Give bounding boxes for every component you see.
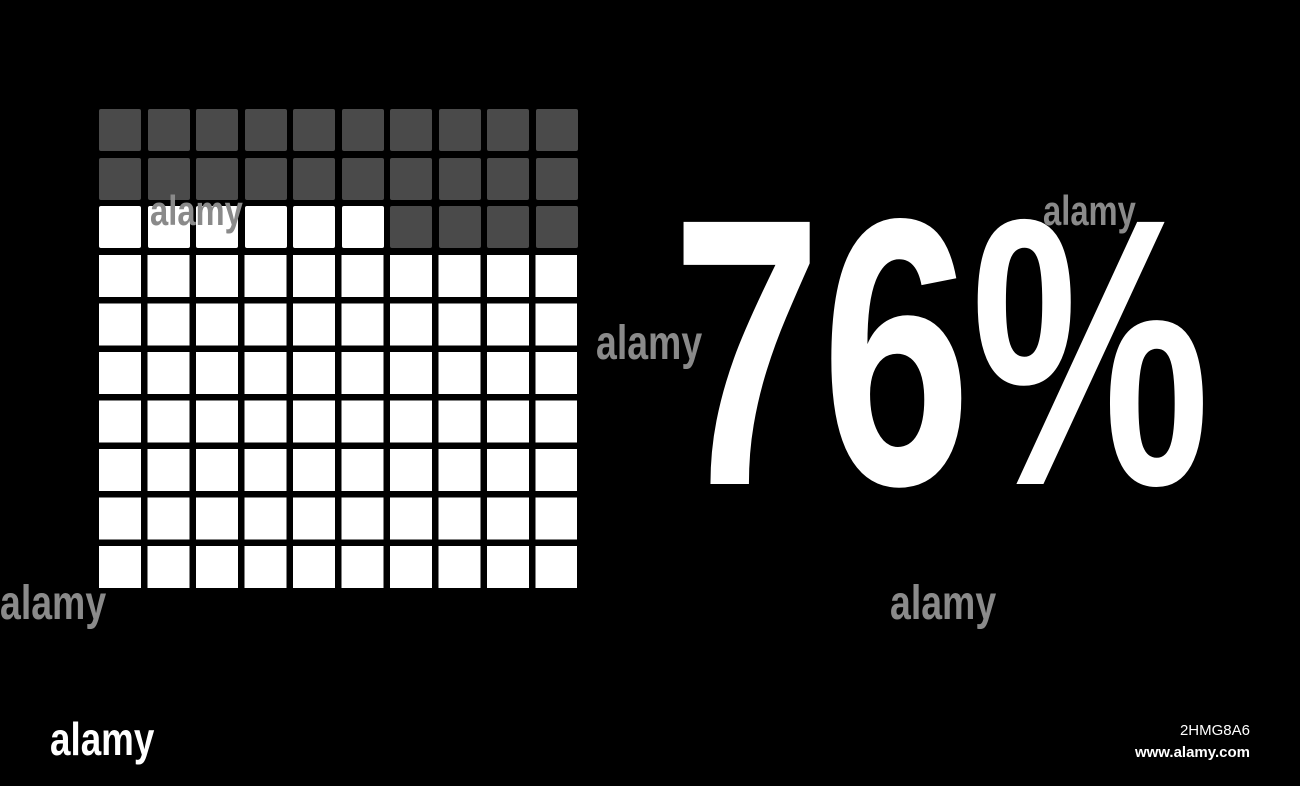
waffle chart: 76 of 100: [99, 109, 578, 588]
footer logo: alamy: [50, 713, 154, 765]
text: alamy: [596, 317, 702, 370]
watermark texts: [0, 187, 1136, 630]
text: alamy: [0, 577, 106, 630]
text: alamy: [150, 187, 243, 234]
footer id and url: [1135, 722, 1250, 761]
footer id and url: 2HMG8A6: [1180, 722, 1250, 739]
text: alamy: [890, 577, 996, 630]
footer id and url: www.alamy.com: [1135, 744, 1250, 761]
text: alamy: [1043, 187, 1136, 234]
